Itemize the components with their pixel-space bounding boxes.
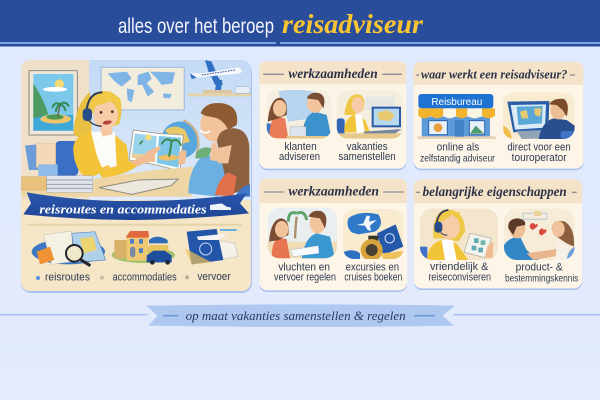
- label: reisroutes: reisroutes: [45, 272, 90, 284]
- panel: waar werkt een reisadviseur: [413, 62, 583, 170]
- label: direct voor een touroperator: touroperator: [512, 152, 567, 164]
- label: excursies en cruises boeken: cruises boeken: [344, 272, 402, 284]
- label: accommodaties: accommodaties: [113, 271, 177, 283]
- label: product- en bestemmingskennis: product- &: [516, 262, 563, 274]
- label: vakanties samenstellen: [338, 141, 396, 163]
- label: vriendelijk en reiseconviseren: reiseconviseren: [428, 272, 491, 284]
- label: product- en bestemmingskennis: bestemmingskennis: [505, 274, 578, 285]
- illustration: klanten adviseren: [262, 90, 332, 139]
- label: vriendelijk en reiseconviseren: vriendelijk &: [430, 261, 489, 273]
- label: klanten adviseren: [279, 141, 320, 163]
- panel: main travel advisor: [21, 60, 252, 293]
- ribbon: reisroutes en accommodaties: reisroutes en accommodaties: [39, 202, 207, 216]
- heading: werkzaamheden: [288, 66, 378, 81]
- illustration: reisbureau: [417, 94, 496, 139]
- label: vervoer: vervoer: [197, 271, 231, 283]
- label: online als zelfstandig adviseur: [420, 141, 496, 164]
- label: vluchten en vervoer regelen: vluchten en: [278, 262, 330, 274]
- label: vluchten en vervoer regelen: vervoer regelen: [274, 272, 336, 284]
- label: vakanties samenstellen: vakanties: [347, 141, 388, 153]
- title: lead text: alles over het beroep: [118, 15, 274, 38]
- ribbon: reisroutes en accommodaties: [23, 192, 249, 220]
- label: excursies en cruises boeken: [344, 262, 402, 284]
- bottom ribbon: op maat vakanties samenstellen & regelen: [186, 309, 406, 323]
- label: vriendelijk en reiseconviseren: [428, 261, 491, 284]
- illustration: touroperator: [503, 92, 576, 140]
- icon: route maps: [32, 231, 106, 266]
- label: product- en bestemmingskennis: [505, 262, 578, 285]
- label: excursies en cruises boeken: excursies en: [346, 262, 399, 274]
- icon: car: [210, 203, 231, 210]
- heading: belangrijke eigenschappen: [423, 184, 567, 199]
- heading: waar werkt een reisadviseur?: [421, 67, 567, 81]
- label: vervoer: [185, 271, 231, 283]
- title: highlighted word: reisadviseur: [282, 9, 424, 39]
- illustration: vriendelijk advisor: [420, 208, 498, 260]
- illustration: advisor with clients: [21, 60, 252, 200]
- illustration: reisbureau: Reisbureau: [431, 97, 482, 108]
- label: online als zelfstandig adviseur: zelfstandig adviseur: [420, 153, 496, 164]
- bottom ribbon: [0, 304, 600, 327]
- label: vakanties samenstellen: samenstellen: [338, 151, 396, 163]
- label: direct voor een touroperator: direct voor een: [507, 141, 571, 153]
- reisroutes, accommodaties, vervoer row: [28, 224, 242, 284]
- label: online als zelfstandig adviseur: online als: [437, 141, 480, 153]
- illustration: vakanties samenstellen: [337, 90, 403, 139]
- label: direct voor een touroperator: [507, 141, 571, 164]
- title banner: [0, 0, 600, 46]
- label: vluchten en vervoer regelen: [274, 262, 336, 284]
- icon: accommodation with cars: [112, 231, 175, 265]
- panel: belangrijke eigenschappen: [414, 179, 582, 290]
- label: klanten adviseren: adviseren: [279, 151, 320, 163]
- illustration: vluchten en vervoer regelen: [268, 208, 337, 258]
- illustration: excursies en cruises boeken: [343, 209, 404, 261]
- panel: werkzaamheden 1: [259, 61, 406, 170]
- label: klanten adviseren: klanten: [284, 141, 317, 153]
- panel: werkzaamheden 2: [259, 179, 407, 292]
- illustration: product en bestemmingskennis: [504, 208, 576, 260]
- heading: werkzaamheden: [288, 183, 379, 198]
- icon: passport and tickets: [185, 229, 238, 264]
